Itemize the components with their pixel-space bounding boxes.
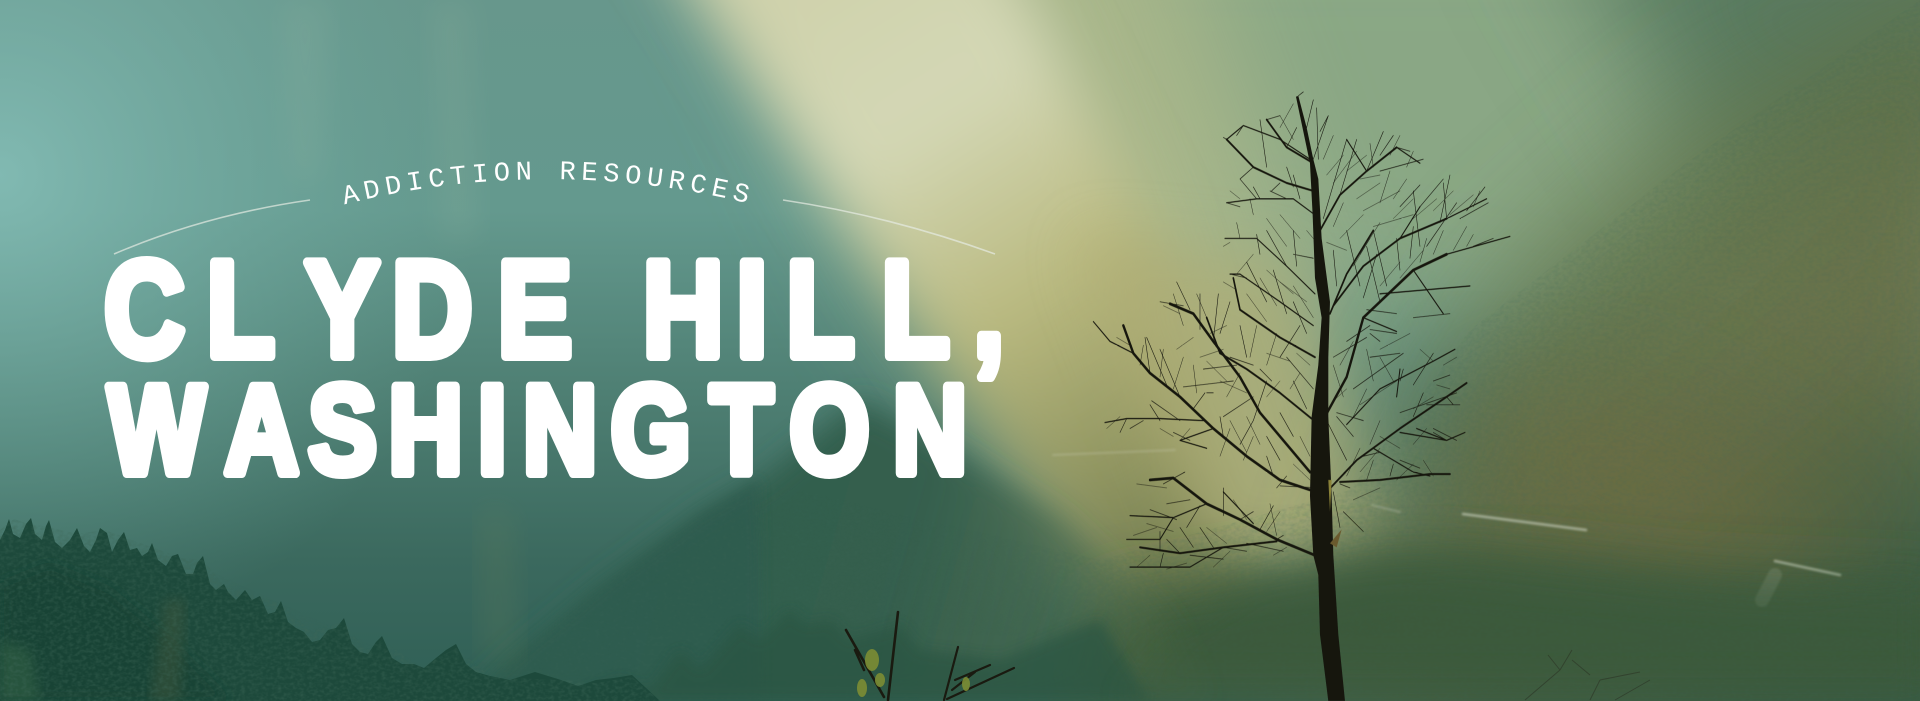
forest: lower left ridge — [0, 516, 700, 701]
icon: bottom right twigs — [1525, 650, 1650, 700]
distant roads and waterfall — [1053, 450, 1840, 600]
title — [104, 234, 1004, 500]
icon: bare tree silhouette — [1093, 92, 1510, 701]
decorative arc: left — [114, 200, 310, 254]
decorative arc: right — [783, 200, 995, 254]
icon: small tree sapling with leaves — [846, 612, 1014, 700]
eyebrow: addiction resources: ADDICTION RESOURCES — [344, 161, 749, 204]
title line 2: WASHINGTON — [108, 361, 967, 500]
title line 1: CLYDE HILL, — [104, 234, 1004, 386]
forest: lower right treeline — [1120, 555, 1920, 701]
forest: lower centre trees — [560, 610, 1150, 701]
